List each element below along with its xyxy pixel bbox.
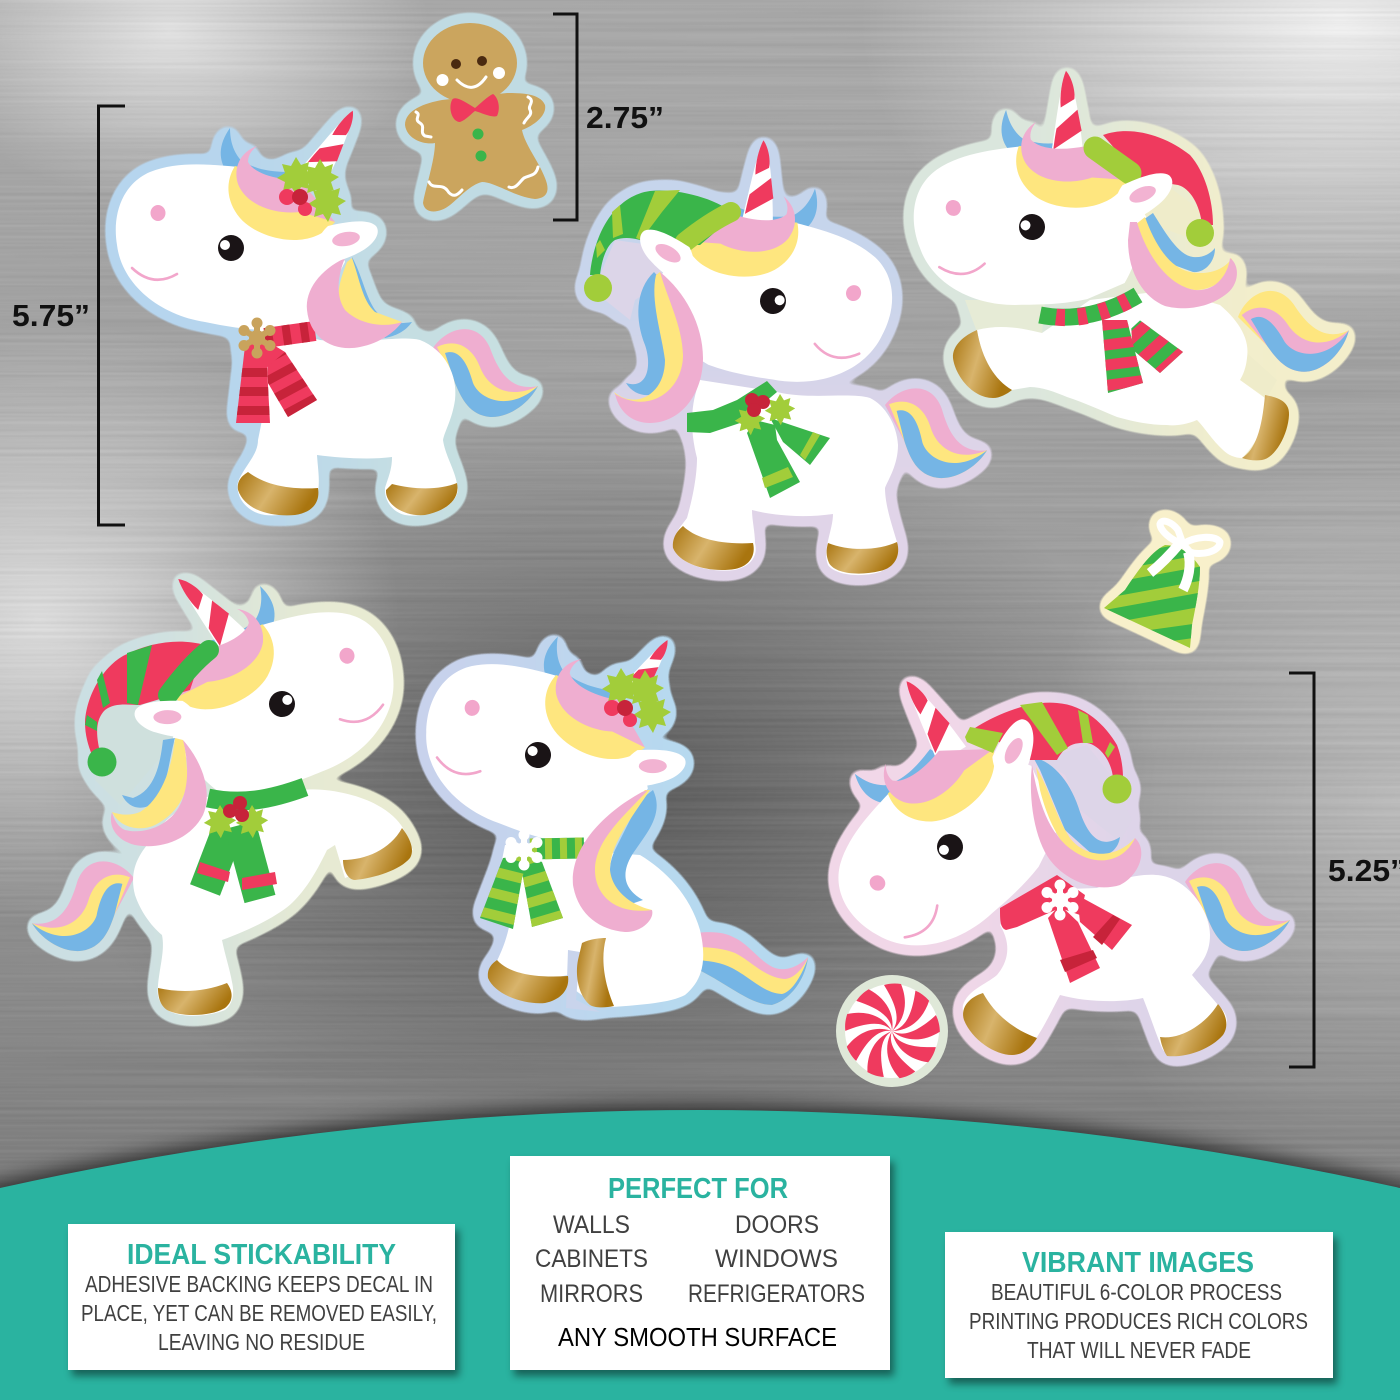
head: [116, 164, 345, 330]
decal: unicorn with red scarf and holly: [116, 103, 538, 516]
body text: THAT WILL NEVER FADE: [1027, 1337, 1251, 1363]
elf hat: [584, 190, 735, 302]
snowflake: [238, 318, 276, 358]
swirl: [844, 983, 941, 1080]
tail: [1185, 863, 1290, 951]
heading: IDEAL STICKABILITY: [127, 1239, 396, 1271]
backing patch: [95, 705, 175, 805]
surfaces list: WALLS: [553, 1211, 630, 1239]
body text: [81, 1271, 437, 1355]
neck mane: [307, 257, 412, 348]
icing: [416, 97, 538, 195]
panel: ideal stickability: [68, 1224, 455, 1370]
hooves: [238, 472, 458, 515]
ear: [618, 743, 687, 796]
neck mane: [614, 272, 703, 423]
body text: BEAUTIFUL 6-COLOR PROCESS: [991, 1279, 1282, 1305]
scarf: [197, 787, 305, 899]
backing patch: [600, 240, 665, 320]
head: [410, 653, 665, 856]
tail: [880, 386, 991, 481]
body: [495, 845, 703, 1007]
hat: [1095, 131, 1214, 247]
surfaces list: WINDOWS: [715, 1245, 838, 1273]
panel: perfect for: [510, 1156, 890, 1370]
body text: PLACE, YET CAN BE REMOVED EASILY,: [81, 1300, 437, 1326]
snowflake: [506, 830, 542, 870]
decal: gift bell: [1095, 521, 1220, 655]
body: [133, 789, 413, 1016]
elf hat: [965, 702, 1132, 804]
snowflake: [1042, 880, 1078, 920]
elf hat: [85, 642, 209, 776]
hooves: [488, 938, 614, 1007]
tail: [28, 859, 139, 954]
horn: [622, 634, 678, 699]
ear and forelock back: [193, 584, 282, 664]
ear: [981, 715, 1053, 791]
decal: peppermint candy: [836, 975, 948, 1087]
curve shadow: [0, 1104, 1400, 1214]
bow: [1150, 521, 1220, 590]
body: [977, 290, 1266, 458]
leg gap: [566, 950, 600, 1012]
surfaces list: CABINETS: [535, 1245, 648, 1273]
horn: [166, 567, 250, 656]
backing patch: [1040, 745, 1132, 842]
teal footer band: [0, 1110, 1400, 1400]
dimension: 2.75 inch: [553, 14, 664, 220]
hooves: [158, 828, 412, 1015]
surfaces list: REFRIGERATORS: [688, 1280, 865, 1308]
forelock: [537, 654, 658, 765]
any smooth surface: ANY SMOOTH SURFACE: [558, 1322, 837, 1352]
ear and forelock back: [221, 128, 298, 194]
head: [813, 706, 1085, 988]
tail: [1234, 275, 1356, 384]
heading: PERFECT FOR: [608, 1173, 788, 1205]
hooves: [673, 526, 898, 574]
surfaces list: MIRRORS: [540, 1280, 643, 1308]
ear and forelock back: [997, 96, 1086, 176]
face: [436, 56, 505, 87]
decal: rearing unicorn with striped hat: [28, 567, 413, 1016]
decal: sitting unicorn with holly: [410, 634, 808, 1012]
head: [638, 183, 910, 417]
body text: ADHESIVE BACKING KEEPS DECAL IN: [85, 1271, 433, 1297]
ear and forelock back: [537, 635, 625, 713]
horn: [893, 672, 966, 763]
tail: [695, 932, 808, 1005]
forelock: [1008, 106, 1132, 220]
heading: VIBRANT IMAGES: [1022, 1247, 1254, 1279]
panel: vibrant images: [945, 1232, 1333, 1378]
backing patch: [965, 300, 1045, 335]
ear and forelock back: [729, 165, 824, 254]
ear and forelock back: [849, 720, 949, 822]
dimension: 5.75 inch: 5.75”: [12, 298, 90, 333]
body text: PRINTING PRODUCES RICH COLORS: [969, 1308, 1308, 1334]
bow tie: [450, 94, 499, 122]
horn: [741, 139, 780, 226]
holly: [602, 668, 671, 733]
forelock: [868, 702, 1008, 844]
forelock: [228, 146, 335, 240]
scarf: [255, 331, 315, 425]
body: [673, 380, 898, 575]
scarf: [495, 848, 584, 930]
ear: [315, 221, 378, 264]
forelock: [160, 603, 283, 716]
neck mane: [573, 790, 657, 932]
scarf: [1000, 875, 1132, 983]
horn: [301, 103, 366, 184]
bell stripes: [1095, 535, 1215, 655]
surfaces list: DOORS: [735, 1211, 819, 1239]
backing patches, hat and tail: [1140, 180, 1277, 398]
tail: [433, 329, 538, 417]
scarf: [687, 381, 830, 498]
holly: [277, 157, 346, 222]
body: [963, 875, 1227, 1055]
body text: LEAVING NO RESIDUE: [158, 1329, 365, 1355]
ear: [1108, 170, 1179, 225]
dimension: 2.75 inch: 2.75”: [586, 100, 664, 135]
body: [405, 93, 548, 212]
head: [154, 600, 411, 806]
holly: [204, 796, 268, 838]
neck mane: [1128, 213, 1237, 308]
body: [237, 325, 458, 516]
head: [423, 23, 517, 103]
decal: gingerbread man: [405, 23, 548, 212]
surfaces list: [535, 1211, 865, 1308]
decal: leaping unicorn with red hat: [902, 71, 1356, 460]
head: [902, 121, 1161, 331]
ear: [630, 226, 703, 287]
hooves: [963, 993, 1226, 1056]
scarf: [1040, 295, 1178, 395]
ear: [133, 694, 203, 748]
holly: [735, 393, 795, 435]
neck mane: [111, 738, 207, 846]
hooves: [953, 330, 1289, 460]
neck mane: [1031, 757, 1141, 887]
dimension: 5.25 inch: [1289, 673, 1400, 1067]
body text: [969, 1279, 1308, 1363]
decal: unicorn with green elf hat: [584, 139, 991, 575]
buttons: [472, 128, 486, 162]
decal: running unicorn with striped hat: [813, 672, 1290, 1056]
dimension: 5.75 inch: [12, 106, 125, 525]
horn: [1050, 71, 1084, 160]
forelock: [678, 170, 810, 294]
